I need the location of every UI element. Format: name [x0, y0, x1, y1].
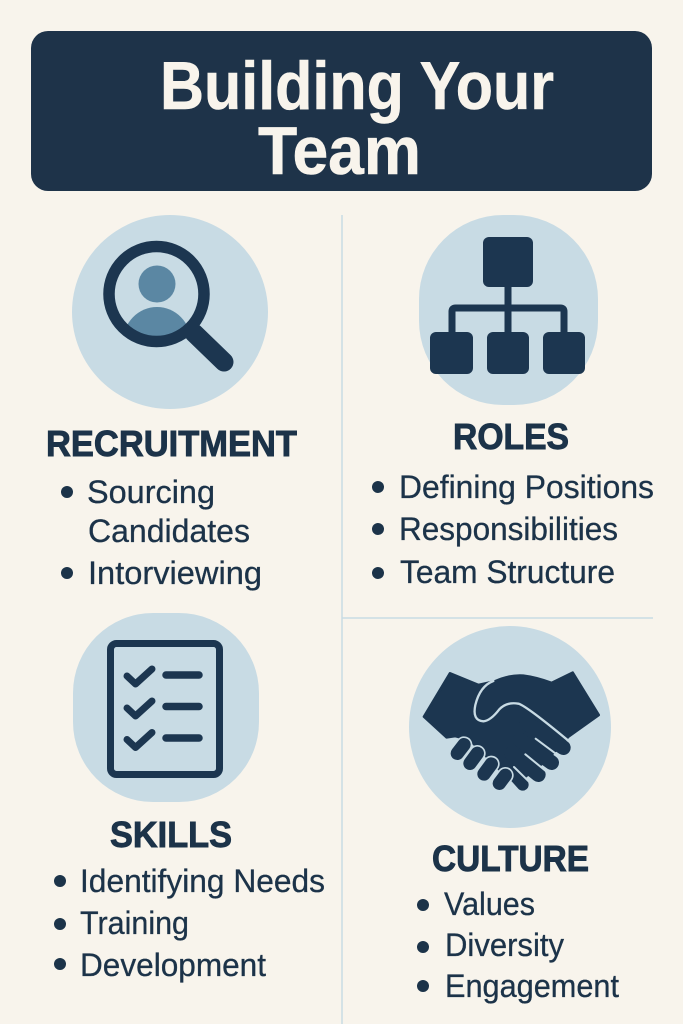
title — [160, 48, 554, 189]
icon: magnifying glass with person — [72, 215, 268, 409]
list: recruitment: Intorviewing — [88, 555, 262, 591]
list: skills: Development — [80, 947, 266, 983]
list: roles: Responsibilities — [399, 511, 618, 547]
list: roles — [372, 469, 654, 590]
list: roles: Defining Positions — [399, 469, 654, 505]
icon: org chart — [419, 215, 598, 405]
list: culture — [417, 886, 619, 1004]
list: roles: Team Structure — [400, 554, 615, 590]
list: recruitment: Sourcing — [87, 474, 215, 510]
list: culture: Diversity — [445, 927, 565, 963]
title: Building Your — [160, 48, 554, 124]
panel: culture — [409, 626, 619, 1004]
icon: checklist — [73, 613, 259, 802]
list: skills — [54, 863, 325, 983]
list: skills: Identifying Needs — [80, 863, 325, 899]
list: recruitment: Candidates — [88, 513, 250, 549]
heading: recruitment: RECRUITMENT — [46, 423, 297, 464]
list: culture: Engagement — [445, 968, 619, 1004]
heading: culture: CULTURE — [432, 838, 589, 879]
icon: handshake — [409, 626, 611, 828]
title banner — [31, 31, 652, 191]
panel: roles — [372, 215, 654, 590]
panel: recruitment — [46, 215, 297, 591]
panel: skills — [54, 613, 325, 983]
list: culture: Values — [444, 886, 535, 922]
list: recruitment — [61, 474, 262, 591]
heading: roles: ROLES — [453, 416, 569, 457]
list: skills: Training — [80, 905, 189, 941]
heading: skills: SKILLS — [110, 814, 232, 855]
title: Team — [258, 113, 421, 189]
